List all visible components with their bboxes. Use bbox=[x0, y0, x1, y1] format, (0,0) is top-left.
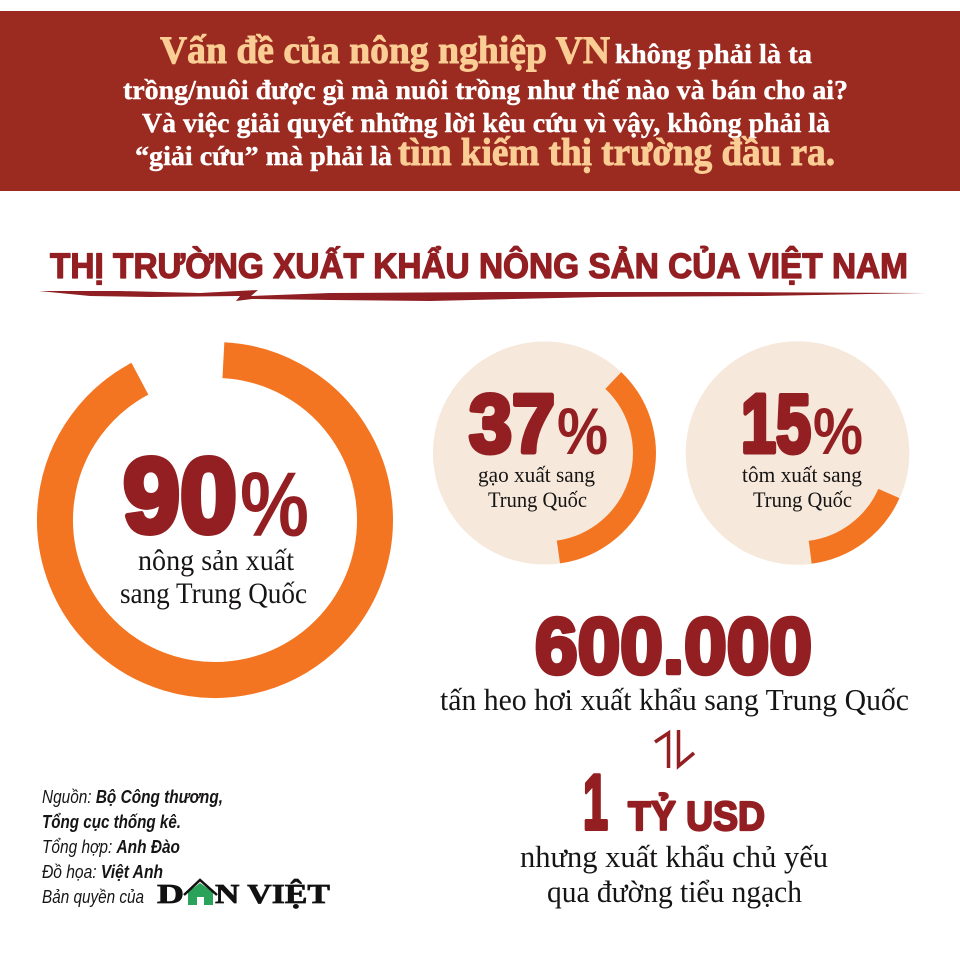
caption: 15% bbox=[742, 462, 862, 512]
stat: 15%: 15 bbox=[741, 377, 811, 470]
stat: 37% bbox=[469, 377, 608, 470]
stat: 90%: % bbox=[240, 454, 309, 556]
panel: top banner bbox=[0, 11, 960, 191]
logo: Dan Viet: N VIỆT bbox=[215, 879, 330, 909]
caption: 90%: sang Trung Quốc bbox=[120, 577, 307, 610]
logo: Dan Viet bbox=[157, 879, 330, 909]
icon: green house bbox=[184, 880, 217, 905]
caption: 90%: nông sản xuất bbox=[138, 544, 295, 577]
banner text bbox=[123, 29, 848, 174]
heading underline swoosh bbox=[39, 290, 926, 301]
stat: 90%: 90 bbox=[123, 437, 237, 555]
caption: 1 billion USD bbox=[520, 839, 828, 909]
stat: 37%: 37 bbox=[469, 377, 555, 470]
caption: 37%: gạo xuất sang bbox=[478, 462, 595, 487]
panel: 90% donut bbox=[55, 360, 375, 680]
credits: Đồ họa: Việt Anh bbox=[42, 861, 163, 882]
arc 15% bbox=[810, 494, 889, 552]
arc 37% bbox=[558, 380, 644, 552]
logo: Dan Viet: D bbox=[157, 879, 184, 909]
caption: 37%: Trung Quốc bbox=[488, 487, 587, 512]
stat: 90% bbox=[123, 437, 309, 556]
stat: 1 billion USD: 1 bbox=[583, 758, 608, 846]
caption: 15%: Trung Quốc bbox=[753, 487, 852, 512]
heading: export markets: THỊ TRƯỜNG XUẤT KHẨU NÔNG SẢN CỦA VIỆT NAM bbox=[50, 246, 908, 286]
caption: 15%: tôm xuất sang bbox=[742, 462, 862, 487]
caption: 1 billion USD: qua đường tiểu ngạch bbox=[547, 874, 802, 909]
caption: 600.000 tonnes: tấn heo hơi xuất khẩu sang Trung Quốc bbox=[440, 682, 909, 717]
stat: 600.000: 600.000 bbox=[535, 601, 812, 690]
caption: 1 billion USD: nhưng xuất khẩu chủ yếu bbox=[520, 839, 828, 874]
stat: 1 billion USD: TỶ USD bbox=[628, 793, 765, 839]
stat: 1 billion USD bbox=[583, 758, 765, 846]
banner text: Và việc giải quyết những lời kêu cứu vì vậy, không phải là bbox=[142, 108, 831, 138]
credits: Tổng hợp: Anh Đào bbox=[42, 836, 180, 857]
caption: 37% bbox=[478, 462, 595, 512]
caption: 90% bbox=[120, 544, 307, 610]
stat: 15%: % bbox=[813, 394, 863, 468]
banner text: không phải là ta bbox=[615, 39, 813, 69]
stat: 37%: % bbox=[557, 394, 608, 468]
icon: exchange arrows bbox=[655, 730, 694, 768]
banner text: trồng/nuôi được gì mà nuôi trồng như thế nào và bán cho ai? bbox=[123, 75, 848, 105]
credits bbox=[42, 786, 223, 907]
panel: 37% rice bbox=[433, 342, 656, 564]
credits: Nguồn: Bộ Công thương, bbox=[42, 786, 223, 807]
panel: 15% shrimp bbox=[686, 341, 909, 565]
banner text: “giải cứu” mà phải là bbox=[135, 141, 393, 171]
banner text: tìm kiếm thị trường đầu ra. bbox=[398, 131, 835, 174]
credits: Tổng cục thống kê. bbox=[42, 811, 181, 832]
credits: Bản quyền của bbox=[42, 886, 144, 907]
donut ring 90% bbox=[55, 360, 375, 680]
banner text: Vấn đề của nông nghiệp VN bbox=[160, 29, 610, 72]
